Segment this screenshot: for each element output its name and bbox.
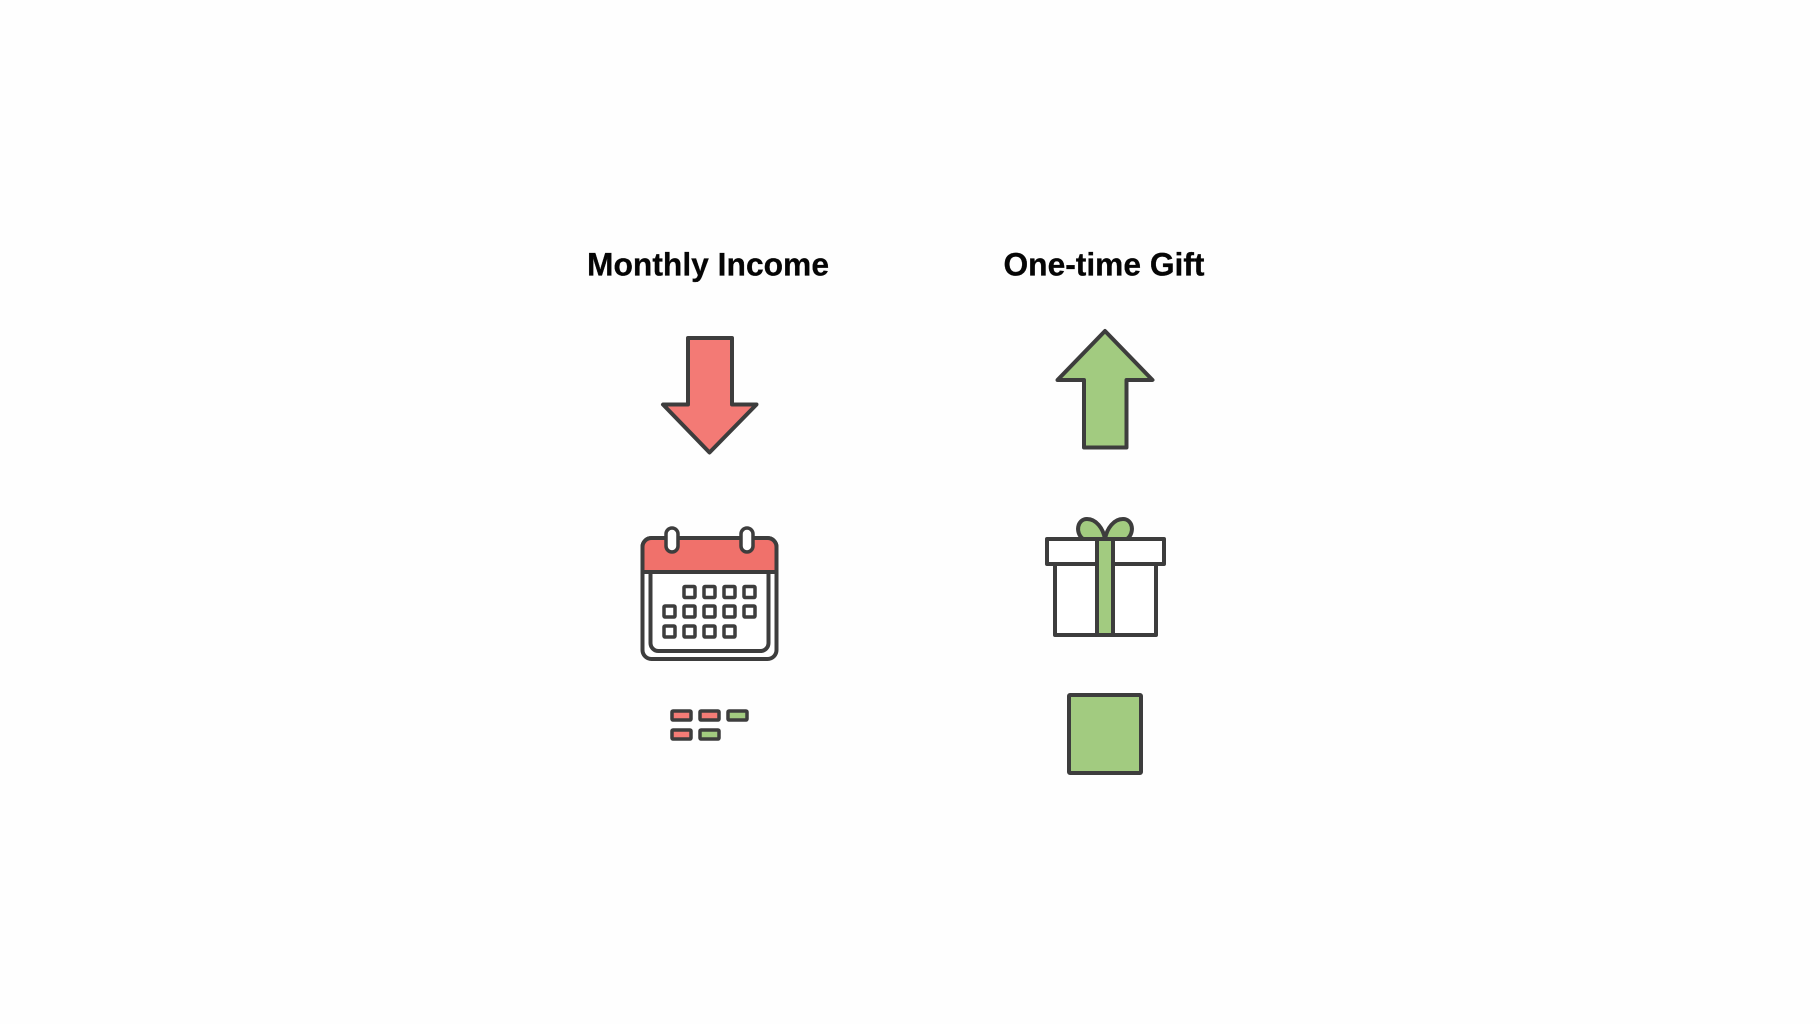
icon: red down arrow — [663, 338, 756, 452]
icon: calendar — [642, 528, 776, 659]
heading: Monthly Income: Monthly Income — [587, 246, 829, 282]
icon: green up arrow — [1058, 331, 1152, 448]
icon: gift box — [1047, 519, 1164, 635]
icon: small status bars — [672, 711, 747, 739]
icon: green square — [1069, 695, 1141, 773]
heading: One-time Gift: One-time Gift — [1004, 246, 1205, 282]
